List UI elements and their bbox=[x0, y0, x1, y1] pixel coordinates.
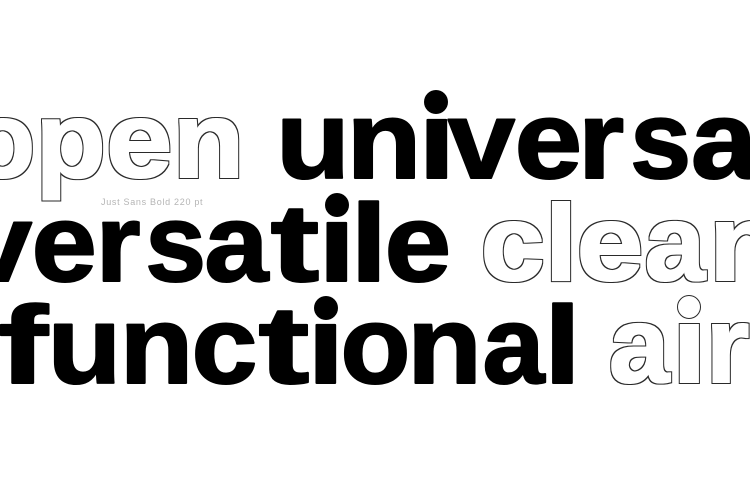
solid word: functional: c bbox=[192, 284, 258, 407]
solid word: functional: u bbox=[48, 284, 122, 407]
solid word: universal: e bbox=[515, 79, 582, 202]
solid word: functional: a bbox=[482, 284, 545, 407]
outlined word: clean: l bbox=[545, 182, 578, 303]
solid word: universal bbox=[276, 79, 750, 202]
solid word: versatile: l bbox=[350, 182, 387, 305]
solid word: universal: s bbox=[630, 79, 691, 202]
solid word: functional: i bbox=[307, 284, 344, 407]
outlined word: air: a bbox=[609, 284, 670, 405]
solid word: versatile: s bbox=[145, 182, 206, 305]
solid word: functional bbox=[0, 284, 581, 407]
solid word: versatile bbox=[0, 182, 451, 305]
solid word: versatile: r bbox=[96, 182, 140, 305]
solid word: functional: l bbox=[544, 284, 581, 407]
outlined word: air: i bbox=[672, 284, 707, 405]
outlined word: clean: e bbox=[576, 182, 644, 303]
solid word: versatile: e bbox=[32, 182, 97, 305]
solid word: universal: v bbox=[448, 79, 515, 202]
outlined word: clean: c bbox=[481, 182, 545, 303]
solid word: versatile: e bbox=[385, 182, 451, 305]
solid word: versatile: a bbox=[204, 182, 269, 305]
caption: font name: Just Sans Bold 220 pt bbox=[101, 197, 203, 207]
solid word: functional: n bbox=[407, 284, 482, 407]
solid word: universal: u bbox=[276, 79, 350, 202]
outlined word: air bbox=[609, 284, 749, 405]
solid word: versatile: i bbox=[318, 182, 355, 305]
solid word: functional: o bbox=[340, 284, 410, 407]
solid word: functional: n bbox=[120, 284, 194, 407]
outlined word: clean: a bbox=[645, 182, 706, 303]
solid word: functional: t bbox=[258, 284, 309, 407]
outlined word: open: p bbox=[35, 79, 106, 200]
outlined word: open: e bbox=[106, 79, 172, 200]
outlined word: open: n bbox=[172, 79, 244, 200]
solid word: universal: i bbox=[418, 79, 455, 202]
solid word: universal: n bbox=[346, 79, 422, 202]
solid word: versatile: t bbox=[271, 182, 319, 305]
outlined word: air: r bbox=[706, 284, 749, 405]
solid word: universal: r bbox=[578, 79, 624, 202]
